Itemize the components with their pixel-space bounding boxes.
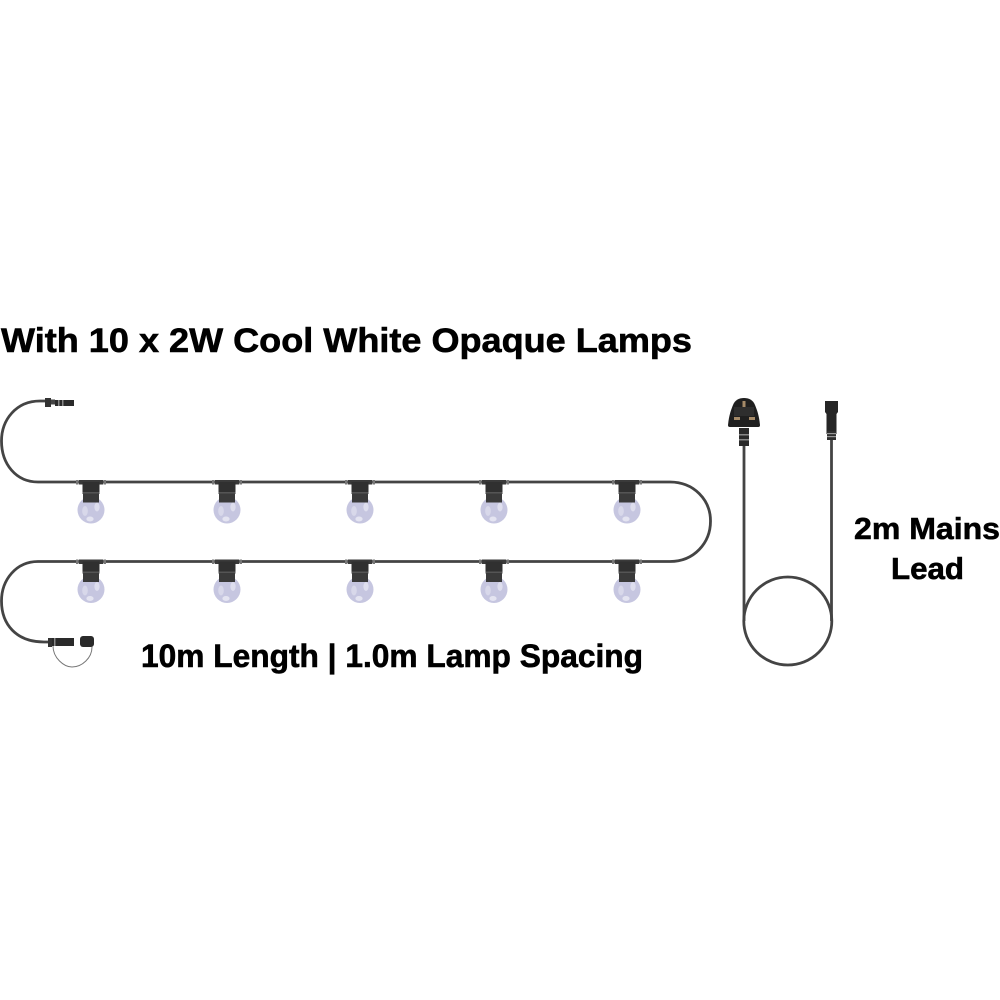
icon: UK plug bbox=[728, 398, 760, 446]
icon: lead connector bbox=[825, 401, 838, 440]
start connector bbox=[45, 398, 74, 407]
festoon string cable bbox=[2, 401, 710, 642]
end connector with cap bbox=[48, 636, 94, 667]
bottom row lamps bbox=[76, 560, 642, 603]
mains lead label: 2m Mains bbox=[854, 511, 1000, 546]
mains lead cable and coil bbox=[744, 440, 832, 665]
mains lead label: Lead bbox=[891, 551, 964, 586]
length and spacing label: 10m Length | 1.0m Lamp Spacing bbox=[141, 638, 643, 674]
title: With 10 x 2W Cool White Opaque Lamps bbox=[1, 322, 692, 360]
mains lead label bbox=[854, 511, 1000, 586]
top row lamps bbox=[76, 480, 642, 524]
